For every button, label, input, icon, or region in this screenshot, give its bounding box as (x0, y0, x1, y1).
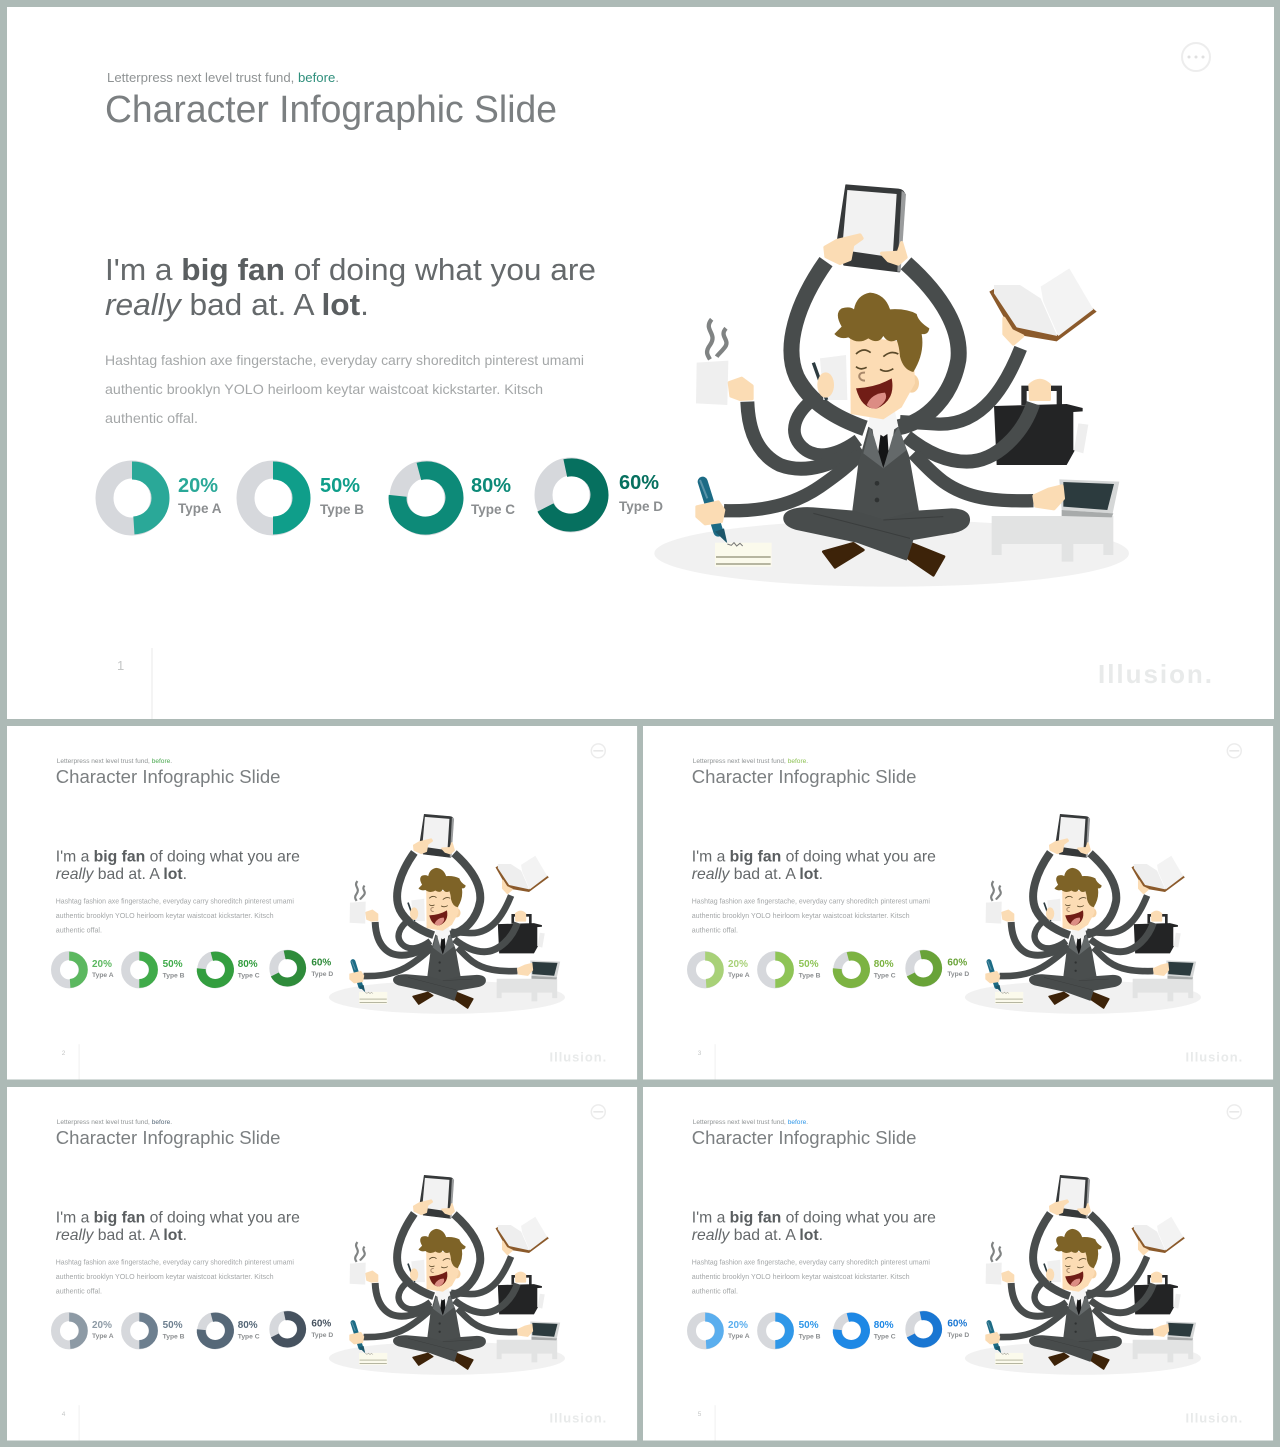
donut: Type A: 20% (178, 475, 218, 497)
donut: Type B (125, 956, 185, 984)
donut: Type D: 60% (947, 957, 967, 968)
donut: Type B: Type B (320, 502, 364, 517)
panel: slide 3, lime (643, 726, 1273, 1080)
page number: 2 (62, 1050, 66, 1057)
quote heading: really bad at. A lot. (692, 1227, 823, 1244)
laptop (1059, 479, 1119, 517)
shoes (823, 543, 944, 575)
title: Character Infographic Slide (56, 767, 281, 788)
donut: Type C: Type C (471, 502, 515, 517)
title: Character Infographic Slide (692, 1128, 917, 1149)
phone and pen (813, 355, 847, 400)
quote heading: really bad at. A lot. (56, 866, 187, 883)
donut: Type A (55, 1317, 114, 1345)
title: Character Infographic Slide (105, 89, 557, 131)
brand wordmark: Illusion. (1186, 1411, 1242, 1426)
body text (56, 899, 294, 935)
donut: Type B (125, 1317, 185, 1345)
body text (692, 1260, 930, 1296)
donut: Type D: 60% (311, 957, 331, 968)
donut: Type C (834, 1314, 896, 1348)
donut: Type A: 20% (728, 1320, 748, 1331)
donut: Type B: Type B (799, 1334, 821, 1341)
body text: authentic offal. (692, 928, 738, 935)
donut: Type D (271, 952, 333, 985)
character illustration (329, 1175, 565, 1375)
donut: Type C (198, 1314, 260, 1348)
kicker text: Letterpress next level trust fund, before. (107, 70, 339, 85)
character illustration (329, 814, 565, 1014)
page number: 5 (698, 1411, 702, 1418)
donut: Type C (834, 953, 896, 987)
donut: Type C: 80% (471, 475, 511, 497)
donut: Type C: Type C (238, 1334, 260, 1341)
panel: main slide, teal (7, 7, 1274, 719)
icon: menu circle (1227, 744, 1241, 758)
quote heading: really bad at. A lot. (56, 1227, 187, 1244)
quote heading: I'm a big fan of doing what you are (105, 252, 596, 287)
quote heading: I'm a big fan of doing what you are (56, 1210, 300, 1227)
tablet (837, 185, 906, 272)
quote heading: I'm a big fan of doing what you are (692, 1210, 936, 1227)
body text: authentic brooklyn YOLO heirloom keytar waistcoat kickstarter. Kitsch (692, 1274, 910, 1281)
head and face (834, 293, 929, 437)
donut: Type D: Type D (311, 1332, 333, 1339)
body text: Hashtag fashion axe fingerstache, everyday carry shoreditch pinterest umami (105, 352, 584, 368)
kicker text: Letterpress next level trust fund, before. (693, 758, 808, 765)
body text: Hashtag fashion axe fingerstache, everyday carry shoreditch pinterest umami (692, 899, 930, 906)
donut: Type D (907, 1313, 969, 1346)
page number: 4 (62, 1411, 66, 1418)
donut: Type D: 60% (947, 1318, 967, 1329)
donut: Type A (55, 956, 114, 984)
donut: Type A: Type A (178, 501, 222, 516)
body text (692, 899, 930, 935)
donut: Type C: 80% (874, 1320, 894, 1331)
donut: Type C: Type C (874, 1334, 896, 1341)
donut: Type C: Type C (238, 973, 260, 980)
icon: menu circle (1227, 1105, 1241, 1119)
title: Character Infographic Slide (692, 767, 917, 788)
donut: Type B: 50% (799, 959, 819, 970)
character illustration (965, 814, 1201, 1014)
body text: authentic brooklyn YOLO heirloom keytar waistcoat kickstarter. Kitsch (105, 381, 543, 397)
panel: slide 5, blue (643, 1087, 1273, 1441)
body text: authentic offal. (105, 410, 198, 426)
donut: Type B (761, 1317, 821, 1345)
character illustration (965, 1175, 1201, 1375)
stool (992, 516, 1113, 562)
body text: authentic brooklyn YOLO heirloom keytar waistcoat kickstarter. Kitsch (692, 913, 910, 920)
donut: Type A (104, 470, 222, 526)
kicker text: Letterpress next level trust fund, before. (57, 758, 172, 765)
paper note (715, 543, 772, 567)
donut: Type B: 50% (163, 959, 183, 970)
panel: slide 4, slate (7, 1087, 637, 1441)
donut: Type A: Type A (92, 1333, 114, 1340)
icon: menu circle (1182, 43, 1210, 71)
donut: Type D: Type D (619, 499, 663, 514)
body text: Hashtag fashion axe fingerstache, everyday carry shoreditch pinterest umami (692, 1260, 930, 1267)
briefcase (994, 388, 1088, 465)
body text (105, 352, 584, 426)
icon: menu circle (591, 744, 605, 758)
quote heading (56, 849, 300, 883)
donut: Type D (907, 952, 969, 985)
donut: Type D: Type D (311, 971, 333, 978)
body text: authentic offal. (692, 1289, 738, 1296)
donut: Type D: 60% (619, 472, 659, 494)
donut: Type B: Type B (163, 1334, 185, 1341)
quote heading (692, 1210, 936, 1244)
quote heading: really bad at. A lot. (692, 866, 823, 883)
donut: Type A (691, 956, 750, 984)
body text: authentic offal. (56, 928, 102, 935)
book (989, 268, 1097, 341)
donut: Type D (537, 462, 663, 528)
donut: Type B: Type B (799, 973, 821, 980)
donut: Type A (691, 1317, 750, 1345)
brand wordmark: Illusion. (1098, 659, 1212, 689)
donut: Type B: 50% (163, 1320, 183, 1331)
kicker text: Letterpress next level trust fund, before. (693, 1119, 808, 1126)
quote heading (105, 252, 596, 322)
donut: Type A: 20% (728, 959, 748, 970)
title: Character Infographic Slide (56, 1128, 281, 1149)
body text: authentic offal. (56, 1289, 102, 1296)
arms (724, 262, 1033, 511)
brand wordmark: Illusion. (550, 1411, 606, 1426)
donut: Type B (244, 470, 364, 526)
body text: authentic brooklyn YOLO heirloom keytar waistcoat kickstarter. Kitsch (56, 1274, 274, 1281)
body text: Hashtag fashion axe fingerstache, everyday carry shoreditch pinterest umami (56, 899, 294, 906)
donut: Type B (761, 956, 821, 984)
kicker text: Letterpress next level trust fund, before. (57, 1119, 172, 1126)
pen and hand (697, 480, 727, 543)
donut: Type D: Type D (947, 1332, 969, 1339)
character illustration (654, 185, 1129, 587)
donut: Type C: 80% (238, 1320, 258, 1331)
panel: slide 2, green (7, 726, 637, 1080)
donut: Type A: 20% (92, 1320, 112, 1331)
page number: 1 (117, 658, 124, 673)
icon: menu circle (591, 1105, 605, 1119)
donut: Type C: 80% (238, 959, 258, 970)
donut: Type A: Type A (728, 972, 750, 979)
donut: Type D: Type D (947, 971, 969, 978)
ground shadow (654, 520, 1129, 587)
quote heading: I'm a big fan of doing what you are (56, 849, 300, 866)
brand wordmark: Illusion. (550, 1050, 606, 1065)
donut: Type C: 80% (874, 959, 894, 970)
page number: 3 (698, 1050, 702, 1057)
torso and suit (852, 423, 919, 523)
donut: Type D (271, 1313, 333, 1346)
quote heading (692, 849, 936, 883)
donut: Type B: 50% (320, 475, 360, 497)
donut: Type A: Type A (92, 972, 114, 979)
donut: Type A: 20% (92, 959, 112, 970)
donut: Type D: 60% (311, 1318, 331, 1329)
coffee cup and steam (696, 319, 728, 405)
donut: Type C: Type C (874, 973, 896, 980)
donut: Type C (198, 953, 260, 987)
body text: authentic brooklyn YOLO heirloom keytar waistcoat kickstarter. Kitsch (56, 913, 274, 920)
body text (56, 1260, 294, 1296)
donut: Type C (391, 464, 515, 532)
donut: Type B: Type B (163, 973, 185, 980)
quote heading: really bad at. A lot. (105, 287, 369, 322)
brand wordmark: Illusion. (1186, 1050, 1242, 1065)
donut: Type B: 50% (799, 1320, 819, 1331)
legs (783, 507, 970, 561)
donut: Type A: Type A (728, 1333, 750, 1340)
quote heading (56, 1210, 300, 1244)
quote heading: I'm a big fan of doing what you are (692, 849, 936, 866)
hands (729, 235, 1063, 509)
body text: Hashtag fashion axe fingerstache, everyday carry shoreditch pinterest umami (56, 1260, 294, 1267)
